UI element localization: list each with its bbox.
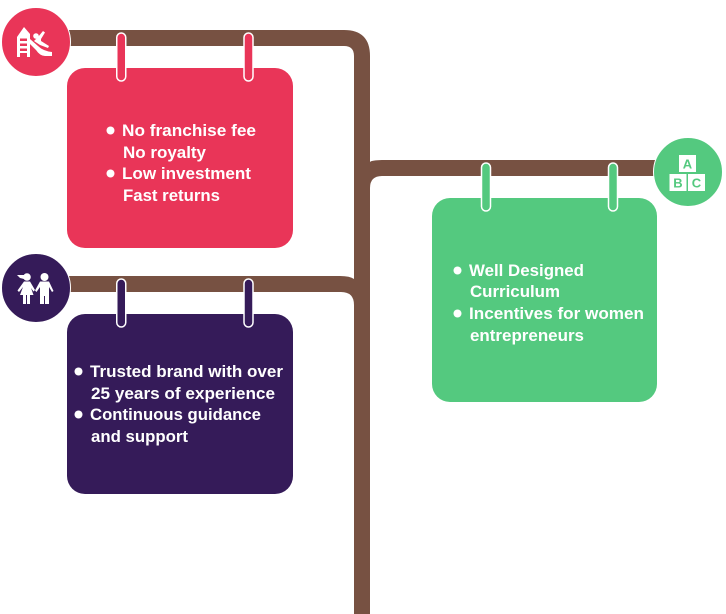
purple card text: Trusted brand with over [90, 363, 284, 381]
red card text: Fast returns [123, 187, 220, 205]
green card text: Curriculum [470, 283, 560, 301]
green card text: Incentives for women [469, 305, 644, 323]
icon: children [2, 254, 70, 322]
red card text: Low investment [122, 165, 252, 183]
green card text: Well Designed [469, 262, 584, 280]
purple card text: and support [91, 428, 189, 446]
icon: ABC blocks: B [673, 176, 683, 190]
panel: purple card [67, 279, 293, 494]
red card text: No franchise fee [122, 122, 256, 140]
panel: green card [432, 163, 657, 402]
icon: ABC blocks [654, 138, 722, 206]
red card text [106, 122, 256, 205]
purple card text: Continuous guidance [90, 406, 261, 424]
red card text: No royalty [123, 144, 207, 162]
panel: red card [67, 33, 293, 248]
green card text [454, 262, 644, 345]
purple card text [74, 363, 284, 446]
purple card text: 25 years of experience [91, 385, 275, 403]
green card text: entrepreneurs [470, 327, 584, 345]
red card hangers [117, 33, 253, 81]
purple card hangers [117, 279, 253, 327]
green card hangers [482, 163, 618, 211]
icon: slide [2, 8, 70, 76]
brown pole and branches [60, 30, 670, 614]
icon: ABC blocks: A [683, 156, 693, 172]
icon: ABC blocks: C [692, 176, 702, 190]
